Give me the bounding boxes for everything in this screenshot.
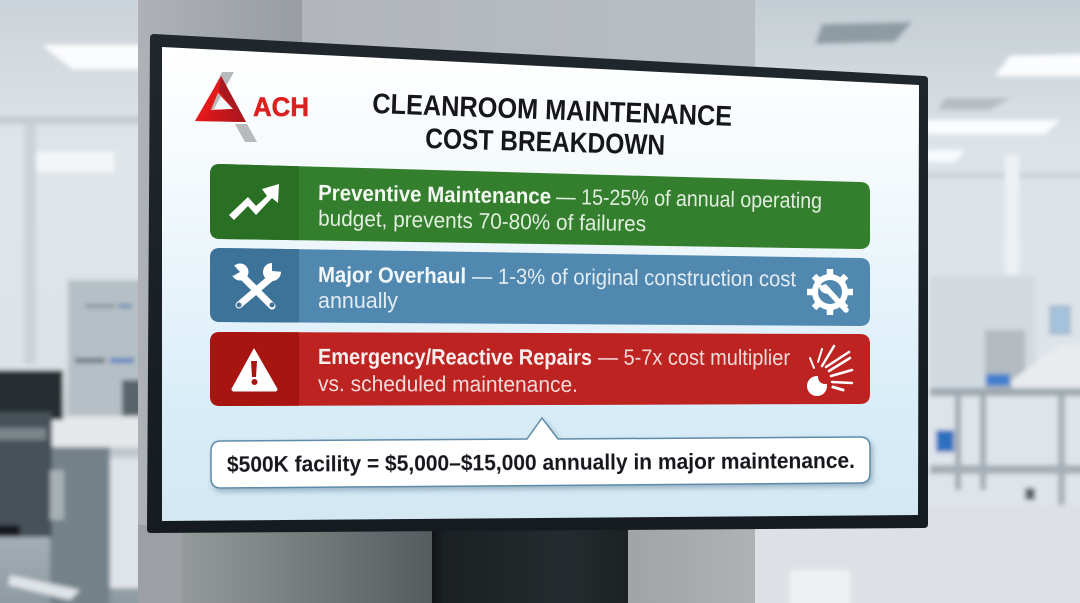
monitor bezel [147,34,928,533]
emergency repairs text [318,344,790,397]
preventive maintenance text: Preventive Maintenance [318,180,551,209]
icon: crossed wrenches [227,258,284,308]
logo mark [195,72,257,142]
title [372,88,733,162]
screen [162,47,919,521]
preventive maintenance text: budget, prevents 70-80% of failures [318,206,646,236]
preventive maintenance text [318,180,822,236]
panel: emergency repairs [210,330,870,408]
title: COST BREAKDOWN [425,123,666,162]
panel: preventive maintenance [210,160,870,249]
preventive maintenance text: — 15-25% of annual operating [556,184,822,213]
logo [195,72,309,142]
callout [211,418,870,488]
concrete column [138,0,302,603]
icon: rising arrow [229,184,279,220]
emergency repairs text: Emergency/Reactive Repairs [318,344,592,370]
icon: warning triangle [232,349,277,391]
left office scene [0,0,145,603]
back wall [302,0,755,603]
panel: major overhaul [210,244,870,326]
right lab scene [750,0,1080,603]
emergency repairs text: — 5-7x cost multiplier [598,345,790,370]
major overhaul text: — 1-3% of original construction cost [472,264,796,291]
icon: gear with wrench [807,269,853,315]
callout text: $500K facility = $5,000–$15,000 annually in major maintenance. [227,448,855,477]
major overhaul text [318,262,796,313]
major overhaul text: annually [318,288,398,313]
emergency repairs text: vs. scheduled maintenance. [318,371,578,397]
title: CLEANROOM MAINTENANCE [372,88,733,133]
logo wordmark: ACH [253,92,309,122]
icon: burst [807,346,852,396]
stand [432,525,628,603]
major overhaul text: Major Overhaul [318,262,466,288]
